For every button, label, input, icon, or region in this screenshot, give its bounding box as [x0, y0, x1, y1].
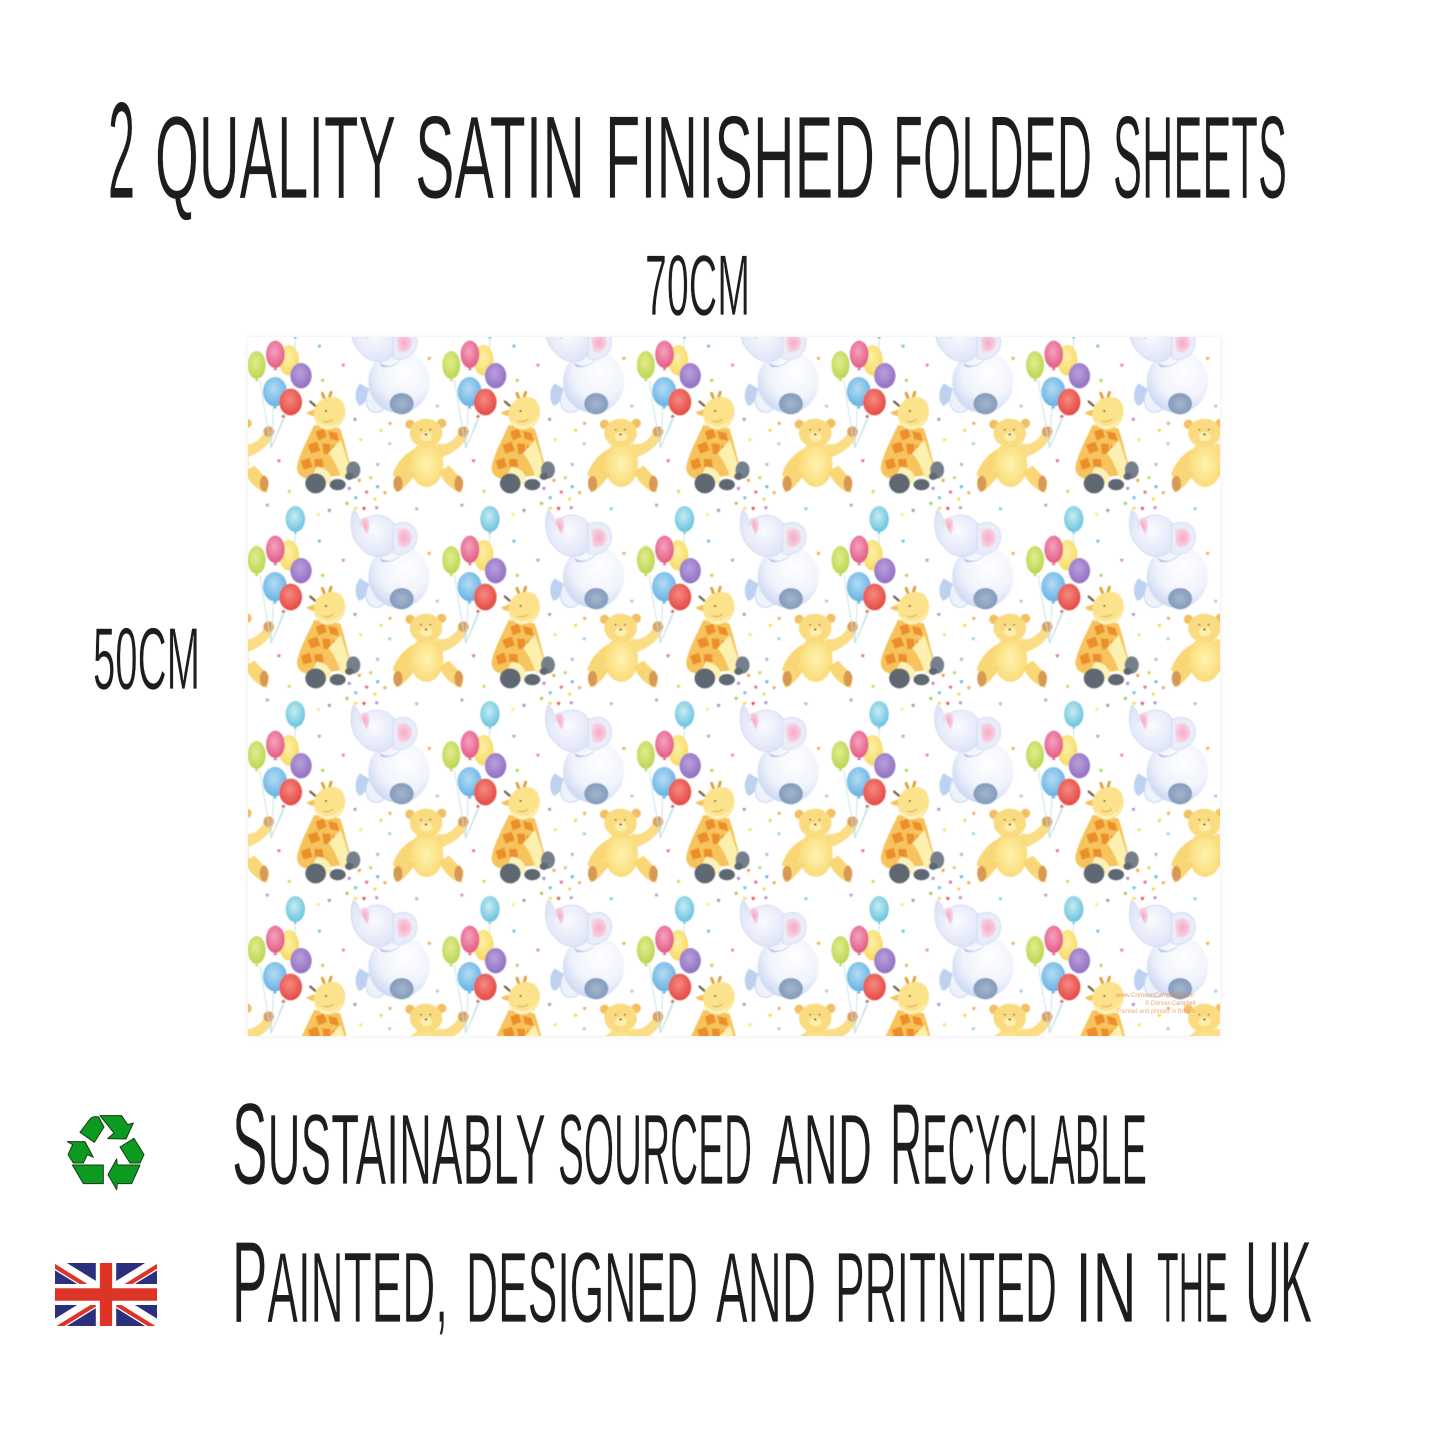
watermark: © Crimson Campbell: [1145, 999, 1195, 1007]
title: QUALITY: [155, 92, 395, 224]
panel: wrapping paper pattern sheet: [248, 337, 1220, 1036]
text: sustainably sourced and recyclable: [232, 1095, 1155, 1195]
title: [108, 90, 1287, 228]
title: FINISHED: [605, 92, 875, 224]
watermark: [1115, 992, 1195, 1015]
watermark: Painted and printed in Britain: [1117, 1008, 1195, 1015]
title: SATIN: [415, 92, 585, 224]
watermark: www.CrimsonCampbell.com: [1115, 992, 1194, 999]
text: painted, designed and printed in the UK: [232, 1232, 1312, 1337]
icon: recycling symbol: [66, 1115, 144, 1190]
icon: UK flag: [55, 1263, 157, 1326]
